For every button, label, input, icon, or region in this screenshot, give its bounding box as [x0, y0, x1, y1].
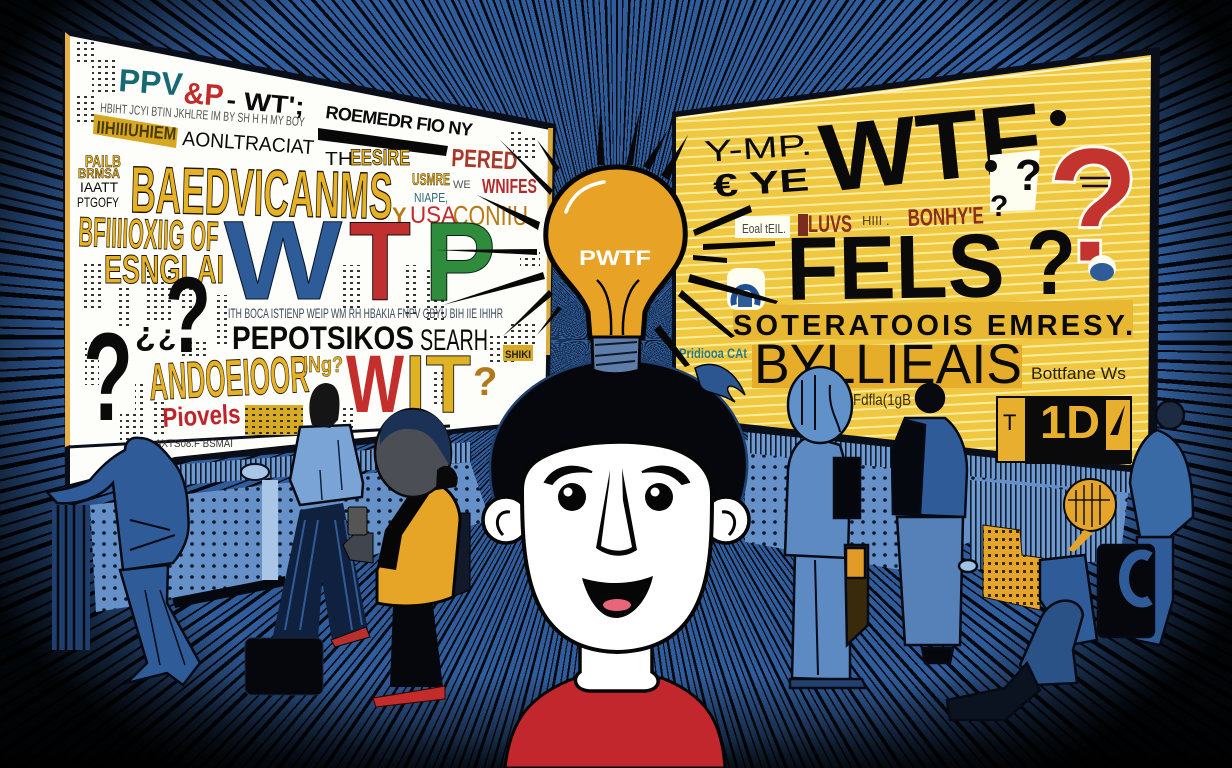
- text: SP: &P: [183, 77, 225, 113]
- shirt: [505, 678, 725, 768]
- text: side small stack: [77, 152, 121, 210]
- small question marks: ?: [1015, 151, 1042, 200]
- text: Y USA CO: USA: [410, 202, 456, 229]
- text: SOTERATOOIS EMRESY: SOTERATOOIS EMRESY.: [733, 310, 1133, 342]
- filament: [597, 280, 639, 335]
- text: tag: Fdfla(1gB: [853, 392, 911, 409]
- main character: [483, 360, 749, 768]
- face: [522, 442, 712, 652]
- hair tuft: [695, 364, 745, 402]
- icon: blue lock: [727, 268, 765, 310]
- text: Y USA CO: CONIIU: [453, 200, 528, 231]
- text: mid row right: WE: [453, 179, 471, 191]
- ear left: [483, 497, 529, 543]
- text: BLUVS: [798, 211, 889, 238]
- text: BYLLIEAIS: BYLLIEAIS: [754, 332, 1022, 395]
- person: woman in yellow coat: [343, 409, 470, 707]
- magnifier: [1064, 479, 1116, 552]
- hair back: [490, 360, 747, 530]
- text: big P: P: [424, 199, 496, 324]
- text: PERED: PERED: [451, 144, 518, 175]
- text: gray line: ITH BOCA ISTIENP WEIP WM RH HBAKIA FNPV GBYU BIH IIE IHIHR: [228, 305, 503, 321]
- black bar: [318, 128, 448, 156]
- person: seated figure: [947, 555, 1097, 720]
- text: side small stack: BRMSA: [78, 165, 120, 181]
- text: Piovels: Piovels: [162, 399, 241, 433]
- text: WT: - WT';: [225, 86, 306, 121]
- text: big T: T: [349, 199, 411, 324]
- small gray line: HBIHT JCYI BTIN JKHLRE IM BY SH H H MY BOY: [100, 100, 306, 129]
- text: colon dot: [1050, 110, 1066, 126]
- text: BLUVS: LUVS: [808, 211, 852, 238]
- text: Y-MP: Y-MP.: [703, 129, 813, 169]
- text: BLUVS: HIII .: [862, 213, 889, 228]
- text: small teal: Pridiooa CAt: [679, 345, 747, 361]
- left board: BFIIIIOXIIG OF: [78, 208, 219, 260]
- text: AONLTRACIAT: AONLTRACIAT: [182, 128, 315, 159]
- text: Y USA CO: [392, 200, 528, 231]
- text: EE SIRE: EESIRE: [350, 145, 410, 170]
- text: mid row right: USMRE: [412, 170, 450, 189]
- light bulb rays: [437, 110, 778, 367]
- black panel TMD: 1D: [1040, 396, 1100, 448]
- text: FELS: FELS: [786, 216, 1005, 320]
- text: side small stack: PTGOFY: [77, 194, 119, 210]
- eye left: [558, 483, 586, 511]
- person: man leaning, dark blue: [47, 438, 200, 685]
- text: mid row right: NIAPE,: [414, 190, 448, 205]
- text: PPV: PPV: [118, 62, 185, 102]
- band behind SOTERATOOIS: [733, 300, 1133, 340]
- band behind BYLLIEAIS: [752, 345, 1022, 388]
- right rail panels: [745, 430, 1132, 570]
- nose: [596, 468, 637, 556]
- bulb label: PWTF: [579, 247, 651, 270]
- building model: [983, 525, 1043, 610]
- text: big W: W: [224, 198, 342, 323]
- ear right: [703, 497, 749, 543]
- text: BONHYE: BONHY'E: [907, 202, 984, 232]
- eyebrow right: [642, 467, 689, 484]
- text: red W and T: IT: [405, 339, 471, 430]
- question marks group: ?: [165, 254, 211, 375]
- text: red W and T: ?: [473, 360, 497, 404]
- person: long-haired figure: [785, 367, 868, 688]
- text: ANDOEIOORING: ANDOEIOOR: [148, 346, 310, 412]
- person: man in light shirt with briefcase: [245, 383, 370, 695]
- right board: [672, 47, 1160, 472]
- person: man in dark jacket: [892, 384, 977, 663]
- text: TH: TH: [325, 149, 353, 169]
- question marks group: ?: [83, 308, 133, 447]
- text: small INg: INg?: [303, 352, 343, 377]
- text: mid row right: [412, 170, 537, 205]
- tongue: [603, 599, 631, 611]
- red question mark: ?: [1046, 113, 1140, 297]
- black panel TMD: T: [1003, 410, 1016, 435]
- text: E YE: € YE: [712, 161, 810, 204]
- white label: Eoal tEIL.: [742, 221, 786, 236]
- text: mid row right: WNIFES: [482, 176, 537, 198]
- text: Bottfane: Bottfane Ws: [1031, 364, 1126, 383]
- left board: [62, 28, 556, 490]
- yellow tag: [503, 345, 533, 361]
- bulb base: [592, 337, 640, 374]
- text: side small stack: PAILB: [85, 152, 121, 171]
- text: WTF: WTF: [815, 83, 1047, 213]
- text: small caption: AXTS08.F BSMAI: [155, 438, 233, 450]
- question marks group: ¿: [135, 315, 156, 353]
- black panel TMD: [997, 396, 1131, 464]
- yellow tag: SHIKI: [505, 349, 531, 361]
- eyebrow left: [545, 467, 592, 484]
- bag: [845, 545, 868, 645]
- question marks group: [83, 254, 211, 447]
- text: PEPOTSIKOS SEARH: SEARH: [420, 324, 488, 357]
- eye right: [645, 483, 673, 511]
- mouth: [582, 576, 653, 618]
- text: red W and T: W: [346, 339, 404, 430]
- icon: briefcase: [245, 638, 323, 695]
- neck: [575, 640, 658, 691]
- text: yellow row 3: ESNGLAI: [104, 248, 224, 292]
- person: right man with black case: [1098, 401, 1193, 645]
- left rail panels: [52, 442, 490, 650]
- yellow block: [245, 405, 303, 435]
- small question marks: ?: [990, 190, 1008, 223]
- text: ROEMEDR: ROEMEDR FIO NY: [325, 102, 474, 140]
- text: thin question: ?: [1026, 212, 1076, 314]
- case: [1098, 545, 1154, 637]
- text: side small stack: IAATT: [80, 179, 118, 195]
- text: PEPOTSIKOS SEARH: PEPOTSIKOS: [232, 320, 414, 356]
- tiny text columns: [75, 42, 540, 445]
- small question marks: [985, 150, 1042, 223]
- text: red W and T: [346, 339, 497, 430]
- text: BAEDVICANMS: BAEDVICANMS: [130, 152, 393, 233]
- question marks group: ¿: [158, 319, 176, 352]
- light bulb: [546, 167, 685, 374]
- white label: [735, 216, 790, 238]
- yellow strip: IIHIIIUHIEM: [96, 117, 177, 144]
- text: Y USA CO: Y: [392, 203, 407, 228]
